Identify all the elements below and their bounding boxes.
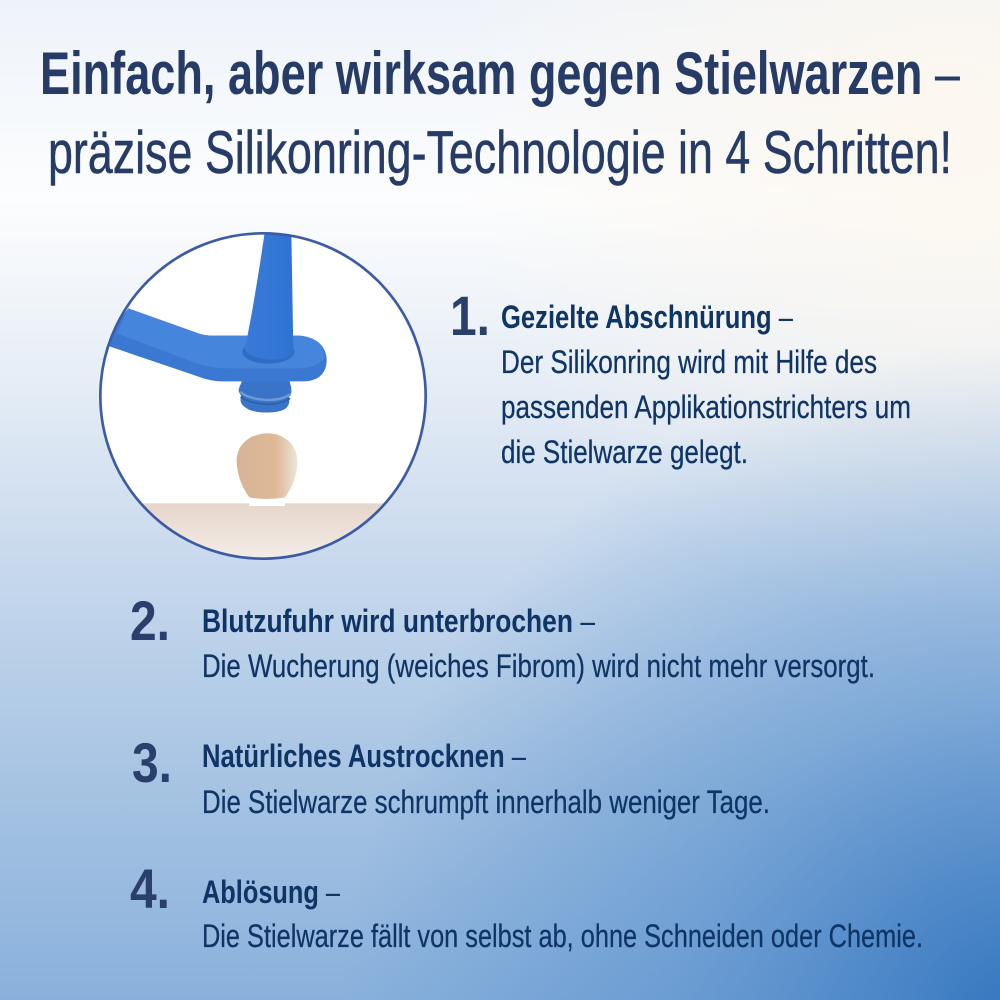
number 4: 4. [130,857,170,920]
applicator cone [242,230,294,364]
icon: applicator above skin tag in circle [90,230,437,563]
number 2: 2. [130,589,170,652]
skin surface [142,503,384,558]
step 1 [450,284,911,470]
step 3 heading: Natürliches Austrocknen – [202,738,526,774]
step 1 heading: Gezielte Abschnürung – [501,299,793,335]
number 1: 1. [450,284,490,347]
title [40,40,960,186]
step 4 [130,857,923,954]
circle border [100,233,426,559]
step 2 [130,589,875,684]
applicator nozzle [239,380,291,413]
step 4 heading: Ablösung – [202,874,340,910]
step 3 text: Die Stielwarze schrumpft innerhalb weniger Tage. [202,784,770,820]
step 2 heading: Blutzufuhr wird unterbrochen – [202,603,595,639]
skin tag [237,433,297,506]
number 3: 3. [132,731,172,794]
step 3 [132,731,770,820]
step 1 text: passenden Applikationstrichters um [501,389,911,425]
applicator arm [107,308,327,381]
step 1 text: Der Silikonring wird mit Hilfe des [501,344,877,380]
step 1 text: die Stielwarze gelegt. [501,434,748,470]
step 1 text [501,344,911,470]
